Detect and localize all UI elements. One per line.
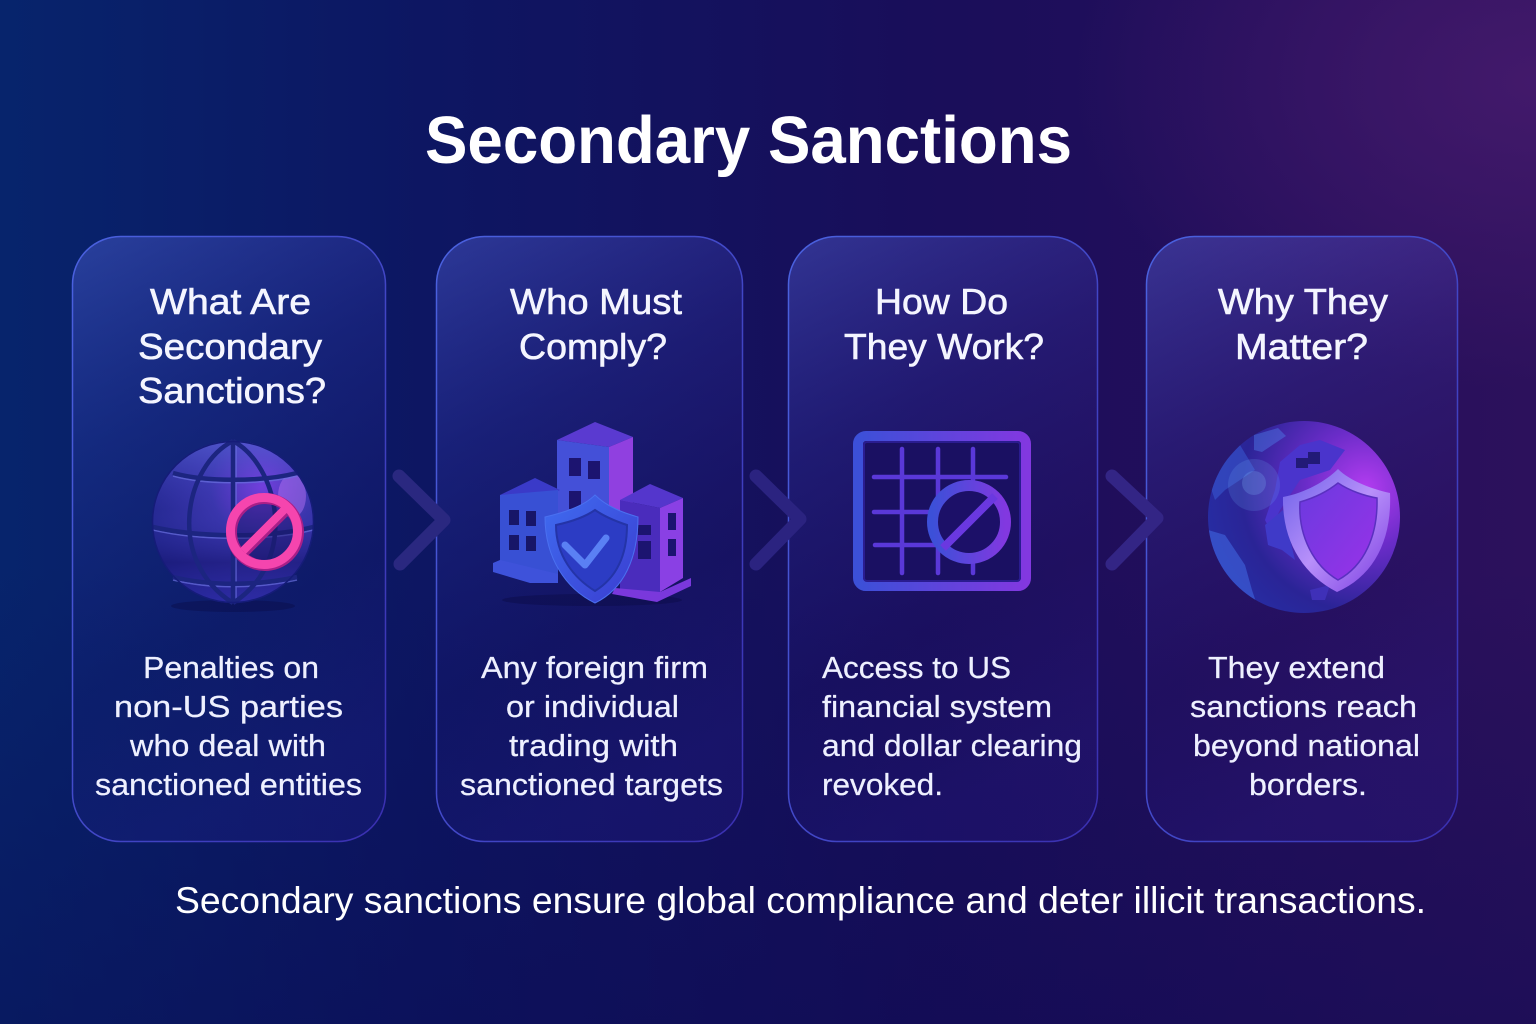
text: how do they work — [822, 650, 1082, 802]
heading: how do they work — [844, 281, 1044, 367]
shield — [545, 495, 638, 603]
text: what are secondary sanctions: non-US parties — [114, 689, 343, 724]
arrow: third to fourth — [1112, 476, 1157, 564]
heading: what are secondary sanctions: What Are — [150, 281, 311, 322]
tall building — [557, 422, 633, 447]
text: what are secondary sanctions: sanctioned entities — [95, 767, 362, 802]
right building — [620, 484, 683, 508]
heading: what are secondary sanctions: Secondary — [138, 326, 322, 367]
panel: who must comply — [436, 236, 742, 842]
text: who must comply: sanctioned targets — [460, 767, 723, 802]
panel: how do they work — [788, 236, 1098, 842]
text: how do they work: revoked. — [822, 767, 943, 802]
panel: why they matter — [1146, 236, 1458, 842]
heading: who must comply — [510, 281, 682, 367]
heading: what are secondary sanctions — [138, 281, 326, 411]
text: who must comply: trading with — [509, 728, 678, 763]
text: how do they work: and dollar clearing — [822, 728, 1082, 763]
text: who must comply — [460, 650, 723, 802]
text: how do they work: Access to US — [822, 650, 1011, 685]
text: how do they work: financial system — [822, 689, 1052, 724]
text: why they matter: beyond national — [1193, 728, 1420, 763]
arrow: second to third — [756, 476, 800, 564]
heading: who must comply: Who Must — [510, 281, 682, 322]
icon: buildings with shield — [493, 422, 691, 606]
title: Secondary Sanctions — [425, 103, 1072, 178]
text: who must comply: or individual — [506, 689, 679, 724]
icon: globe with shield — [1208, 421, 1400, 620]
heading: how do they work: They Work? — [844, 326, 1044, 367]
arrow: first to second — [399, 476, 444, 564]
text: why they matter: sanctions reach — [1190, 689, 1417, 724]
heading: what are secondary sanctions: Sanctions? — [138, 370, 326, 411]
icon: blocked financial grid — [858, 436, 1026, 586]
left building — [500, 478, 560, 500]
text: what are secondary sanctions: Penalties on — [143, 650, 319, 685]
footer statement: Secondary sanctions ensure global compliance and deter illicit transactions. — [175, 880, 1426, 921]
icon: globe with prohibition sign — [152, 441, 314, 612]
text: what are secondary sanctions — [95, 650, 362, 802]
text: why they matter — [1190, 650, 1420, 802]
text: why they matter: borders. — [1249, 767, 1367, 802]
heading: why they matter: Matter? — [1235, 326, 1368, 367]
heading: why they matter — [1218, 281, 1388, 367]
text: what are secondary sanctions: who deal with — [129, 728, 326, 763]
text: who must comply: Any foreign firm — [481, 650, 708, 685]
heading: how do they work: How Do — [875, 281, 1008, 322]
panel: what are secondary sanctions — [72, 236, 386, 842]
heading: who must comply: Comply? — [519, 326, 667, 367]
text: why they matter: They extend — [1208, 650, 1385, 685]
heading: why they matter: Why They — [1218, 281, 1388, 322]
